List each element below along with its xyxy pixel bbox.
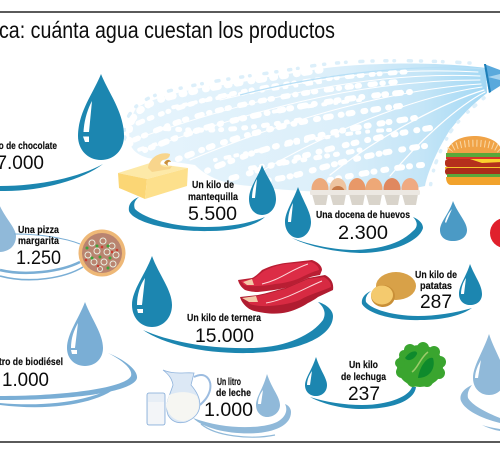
water spray from nozzle	[124, 61, 487, 192]
swooshes	[193, 404, 291, 433]
streaks	[133, 71, 485, 176]
icon: water drop	[132, 256, 172, 327]
swoosh	[0, 164, 103, 191]
edge speckles	[124, 61, 484, 190]
panel: leche	[147, 370, 291, 437]
icon: water drop	[78, 74, 124, 160]
label: Un kilo	[349, 359, 378, 371]
panel: lechuga	[305, 342, 446, 409]
icon: lettuce	[395, 342, 446, 387]
panel: mantequilla	[118, 153, 276, 231]
label: Un kilo de ternera	[187, 312, 261, 324]
icon: water drop	[67, 302, 103, 366]
panel: ternera	[132, 256, 333, 353]
number: 5.500	[188, 204, 237, 225]
icon: water drop (hamburger)	[440, 201, 467, 241]
icon: water drop	[473, 334, 500, 395]
panel: pizza	[0, 204, 126, 280]
icon: water drop	[0, 204, 16, 252]
label: Una pizza	[18, 224, 59, 236]
label: Un kilo de	[192, 179, 234, 191]
number: 15.000	[195, 326, 254, 347]
icon: water drop	[249, 165, 276, 215]
panel: patatas	[362, 264, 482, 320]
panel: right cropped item	[460, 334, 500, 431]
swooshes	[0, 234, 83, 280]
number: 1.000	[204, 400, 253, 421]
swoosh	[292, 217, 423, 253]
swoosh	[129, 197, 265, 231]
number: 287	[420, 292, 452, 313]
upper blue streak	[240, 68, 484, 95]
number: 1.250	[16, 248, 61, 269]
icon: water drop	[305, 357, 327, 396]
icon: water drop	[459, 264, 482, 305]
icon: meat	[238, 260, 333, 314]
panel: leche: de leche	[216, 387, 251, 399]
icon: tomato	[490, 218, 500, 248]
icon: hamburger	[445, 136, 500, 185]
title: ca: cuánta agua cuestan los productos	[0, 17, 335, 43]
swooshes	[0, 353, 137, 400]
icon: butter	[118, 153, 188, 199]
panel: mantequilla: mantequilla	[188, 191, 238, 203]
panel: patatas: patatas	[420, 280, 452, 292]
icon: sprinkler nozzle	[484, 64, 500, 93]
number: 2.300	[338, 223, 388, 244]
panel: pizza: margarita	[18, 235, 59, 247]
label: Una docena de huevos	[316, 209, 410, 221]
panel: huevos	[285, 178, 423, 253]
icon: water drop	[256, 374, 280, 417]
swoosh	[362, 291, 472, 320]
swoosh	[310, 387, 416, 409]
icon: egg carton	[310, 178, 420, 205]
number: 237	[348, 384, 380, 405]
swooshes	[460, 385, 500, 423]
icon: pizza	[78, 230, 126, 276]
panel: biodiésel	[0, 302, 137, 407]
icon: milk jug and glass	[147, 370, 210, 425]
label: Un litro	[217, 376, 241, 388]
swoosh	[143, 302, 333, 353]
icon: potato	[371, 272, 416, 307]
number: 1.000	[2, 370, 49, 391]
panel: lechuga: de lechuga	[341, 371, 386, 383]
label: Un kilo de	[415, 269, 457, 281]
white mottling	[129, 70, 430, 182]
icon: water drop	[285, 187, 311, 238]
panel: chocolate	[0, 74, 124, 191]
